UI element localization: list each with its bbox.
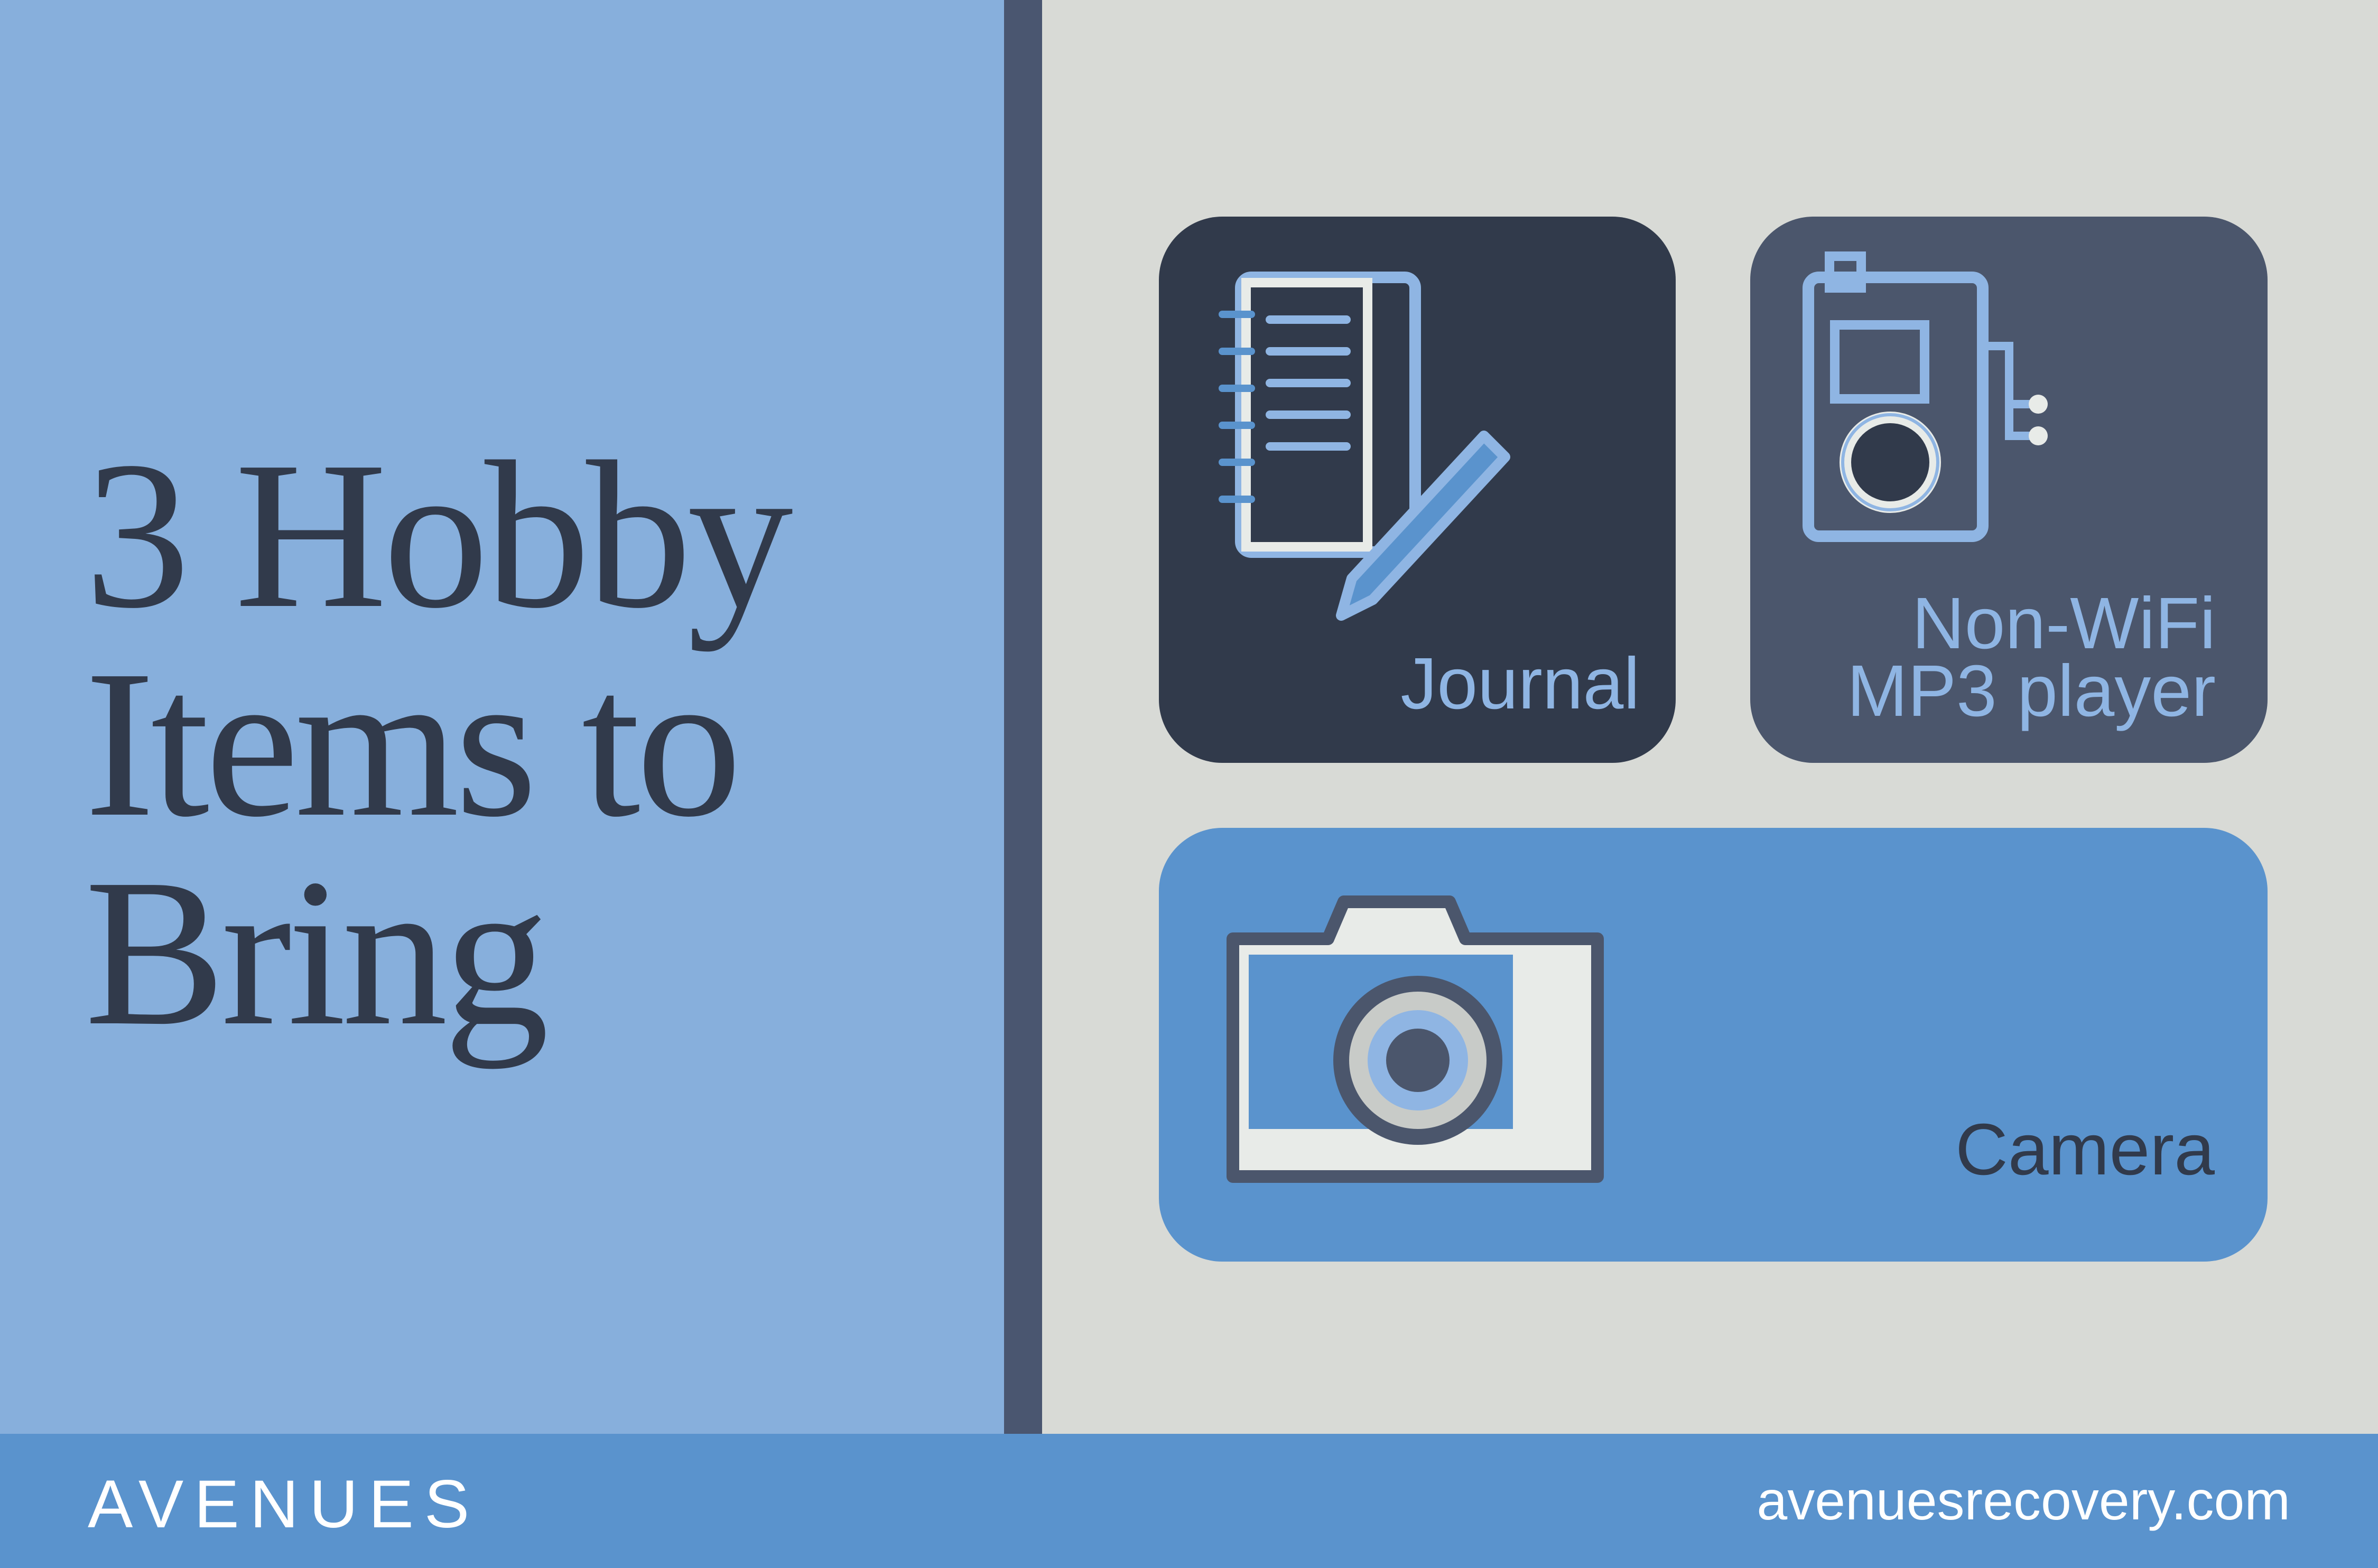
title: Items to <box>85 627 738 861</box>
panel: mp3 card <box>1750 217 2268 763</box>
panel: camera card <box>1159 828 2268 1262</box>
label: Non-WiFi MP3 player: Non-WiFi <box>1912 583 2216 664</box>
label: Non-WiFi MP3 player <box>1847 583 2216 732</box>
website url: avenuesrecovery.com <box>1757 1470 2290 1532</box>
title: Bring <box>85 835 545 1069</box>
icon: notebook and pencil <box>1219 272 1510 621</box>
panel: left title background <box>0 0 1007 1434</box>
footer bar <box>0 1434 2378 1568</box>
title: 3 Hobby <box>85 418 789 652</box>
label: Journal: Journal <box>1400 643 1640 724</box>
icon: camera <box>1227 895 1604 1183</box>
title <box>85 418 793 1069</box>
logo: AVENUES: AVENUES <box>88 1467 480 1542</box>
label: Non-WiFi MP3 player: MP3 player <box>1847 650 2216 732</box>
divider stripe <box>1004 0 1042 1434</box>
label: Camera: Camera <box>1955 1109 2215 1190</box>
icon: mp3 player <box>1803 251 2048 542</box>
panel: journal card <box>1159 217 1676 763</box>
